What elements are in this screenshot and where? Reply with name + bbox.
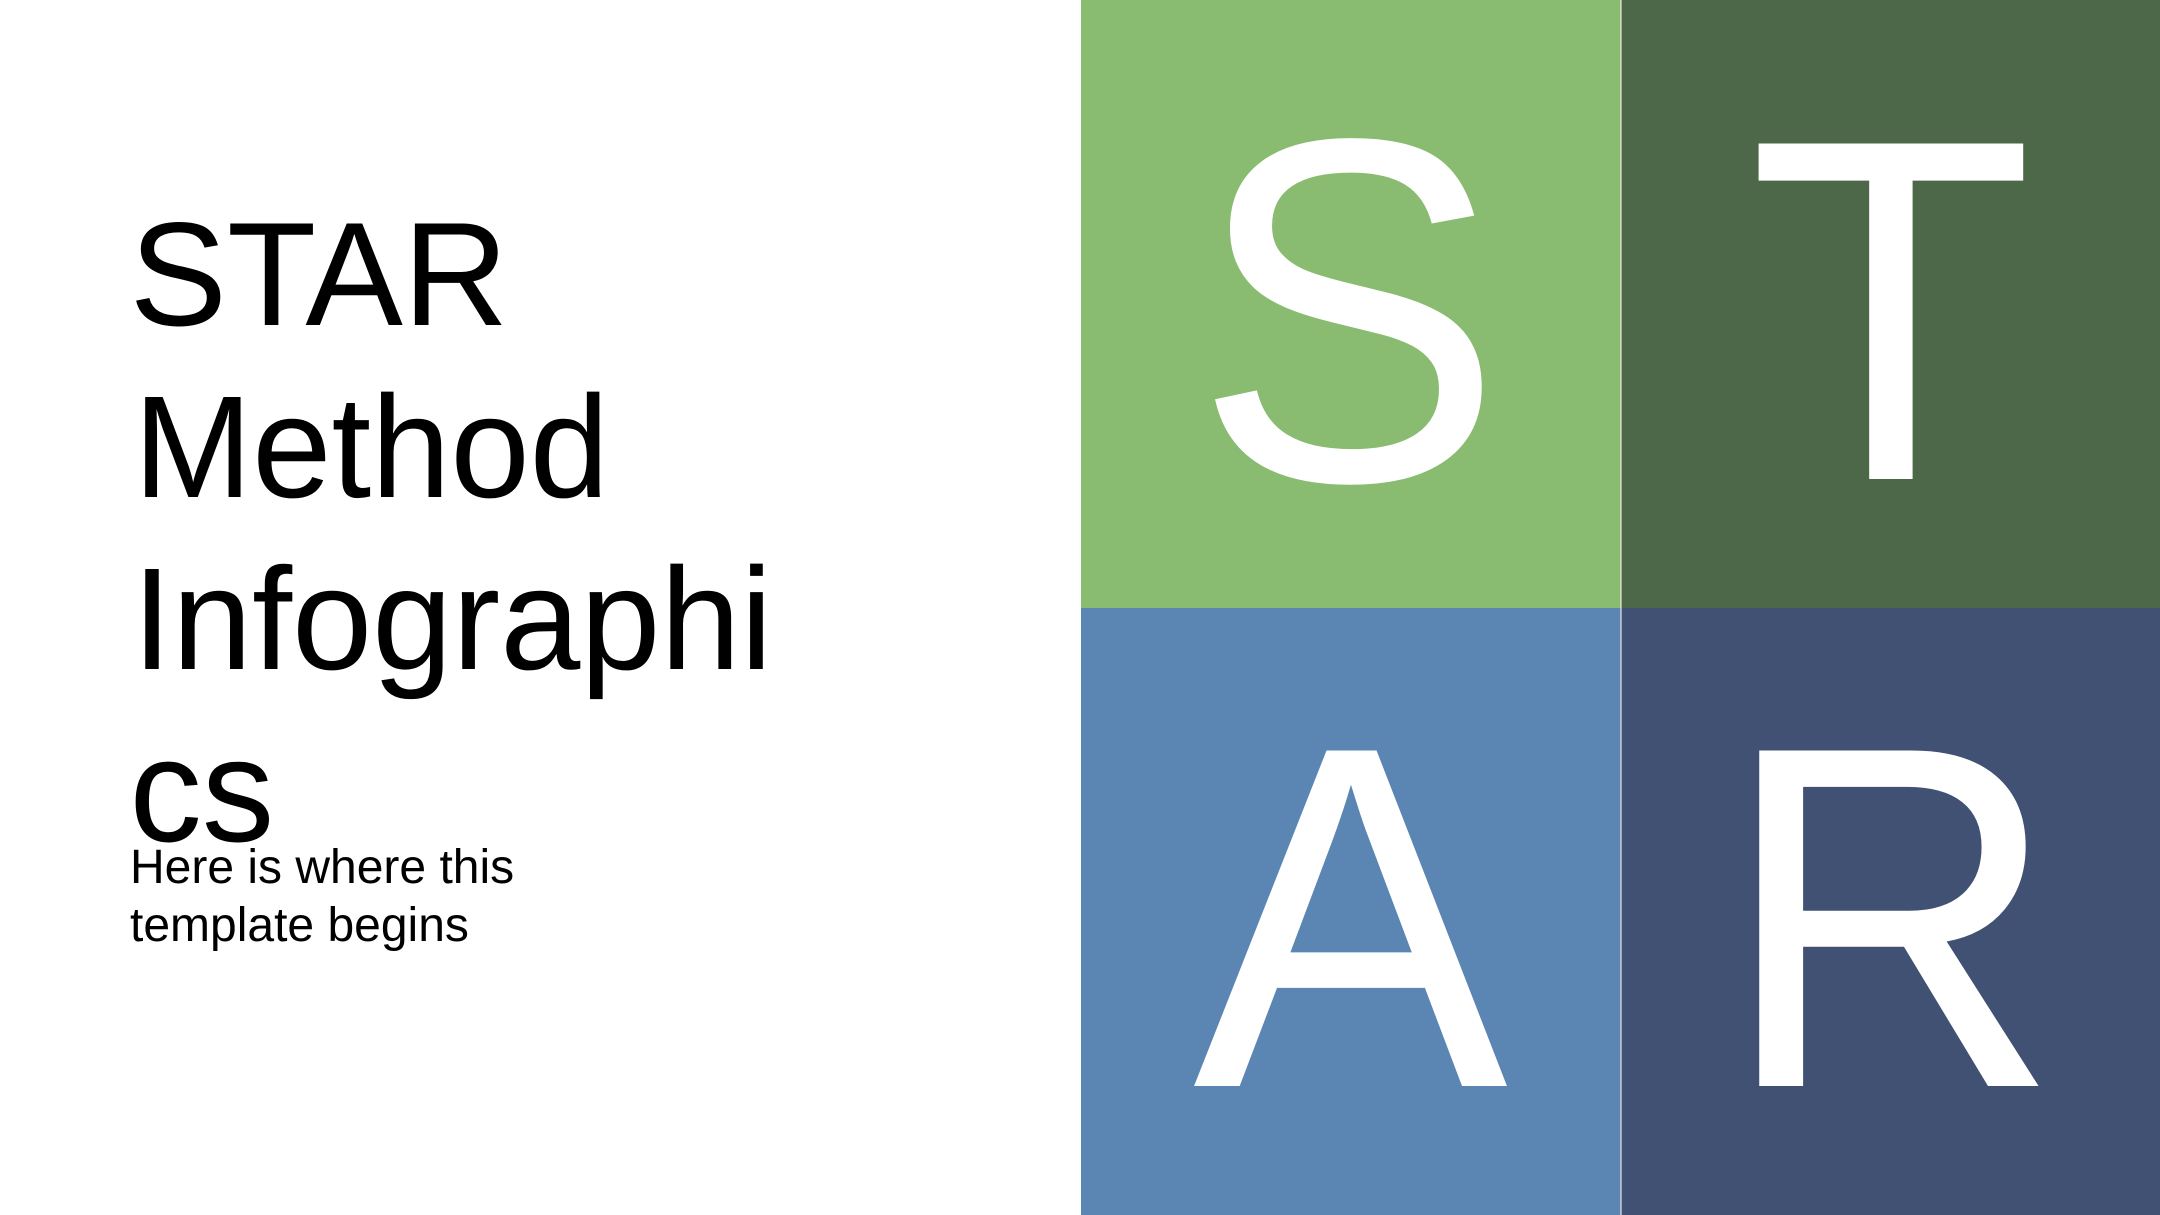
panel: R xyxy=(1622,608,2160,1215)
title xyxy=(130,192,772,872)
title: STAR xyxy=(130,192,508,357)
title: cs xyxy=(130,708,274,872)
title: Method xyxy=(134,366,609,528)
subtitle text: template begins xyxy=(130,899,469,952)
panel: R: R xyxy=(1721,644,2060,1190)
panel: S: S xyxy=(1194,37,1503,584)
panel: S xyxy=(1081,0,1620,608)
title: Infographi xyxy=(132,537,772,700)
panel: T: T xyxy=(1748,38,2034,583)
subtitle text: Here is where this xyxy=(130,841,514,894)
panel: A: A xyxy=(1193,645,1510,1190)
panel: A xyxy=(1081,608,1620,1215)
panel: T xyxy=(1622,0,2160,608)
subtitle text xyxy=(130,841,514,952)
